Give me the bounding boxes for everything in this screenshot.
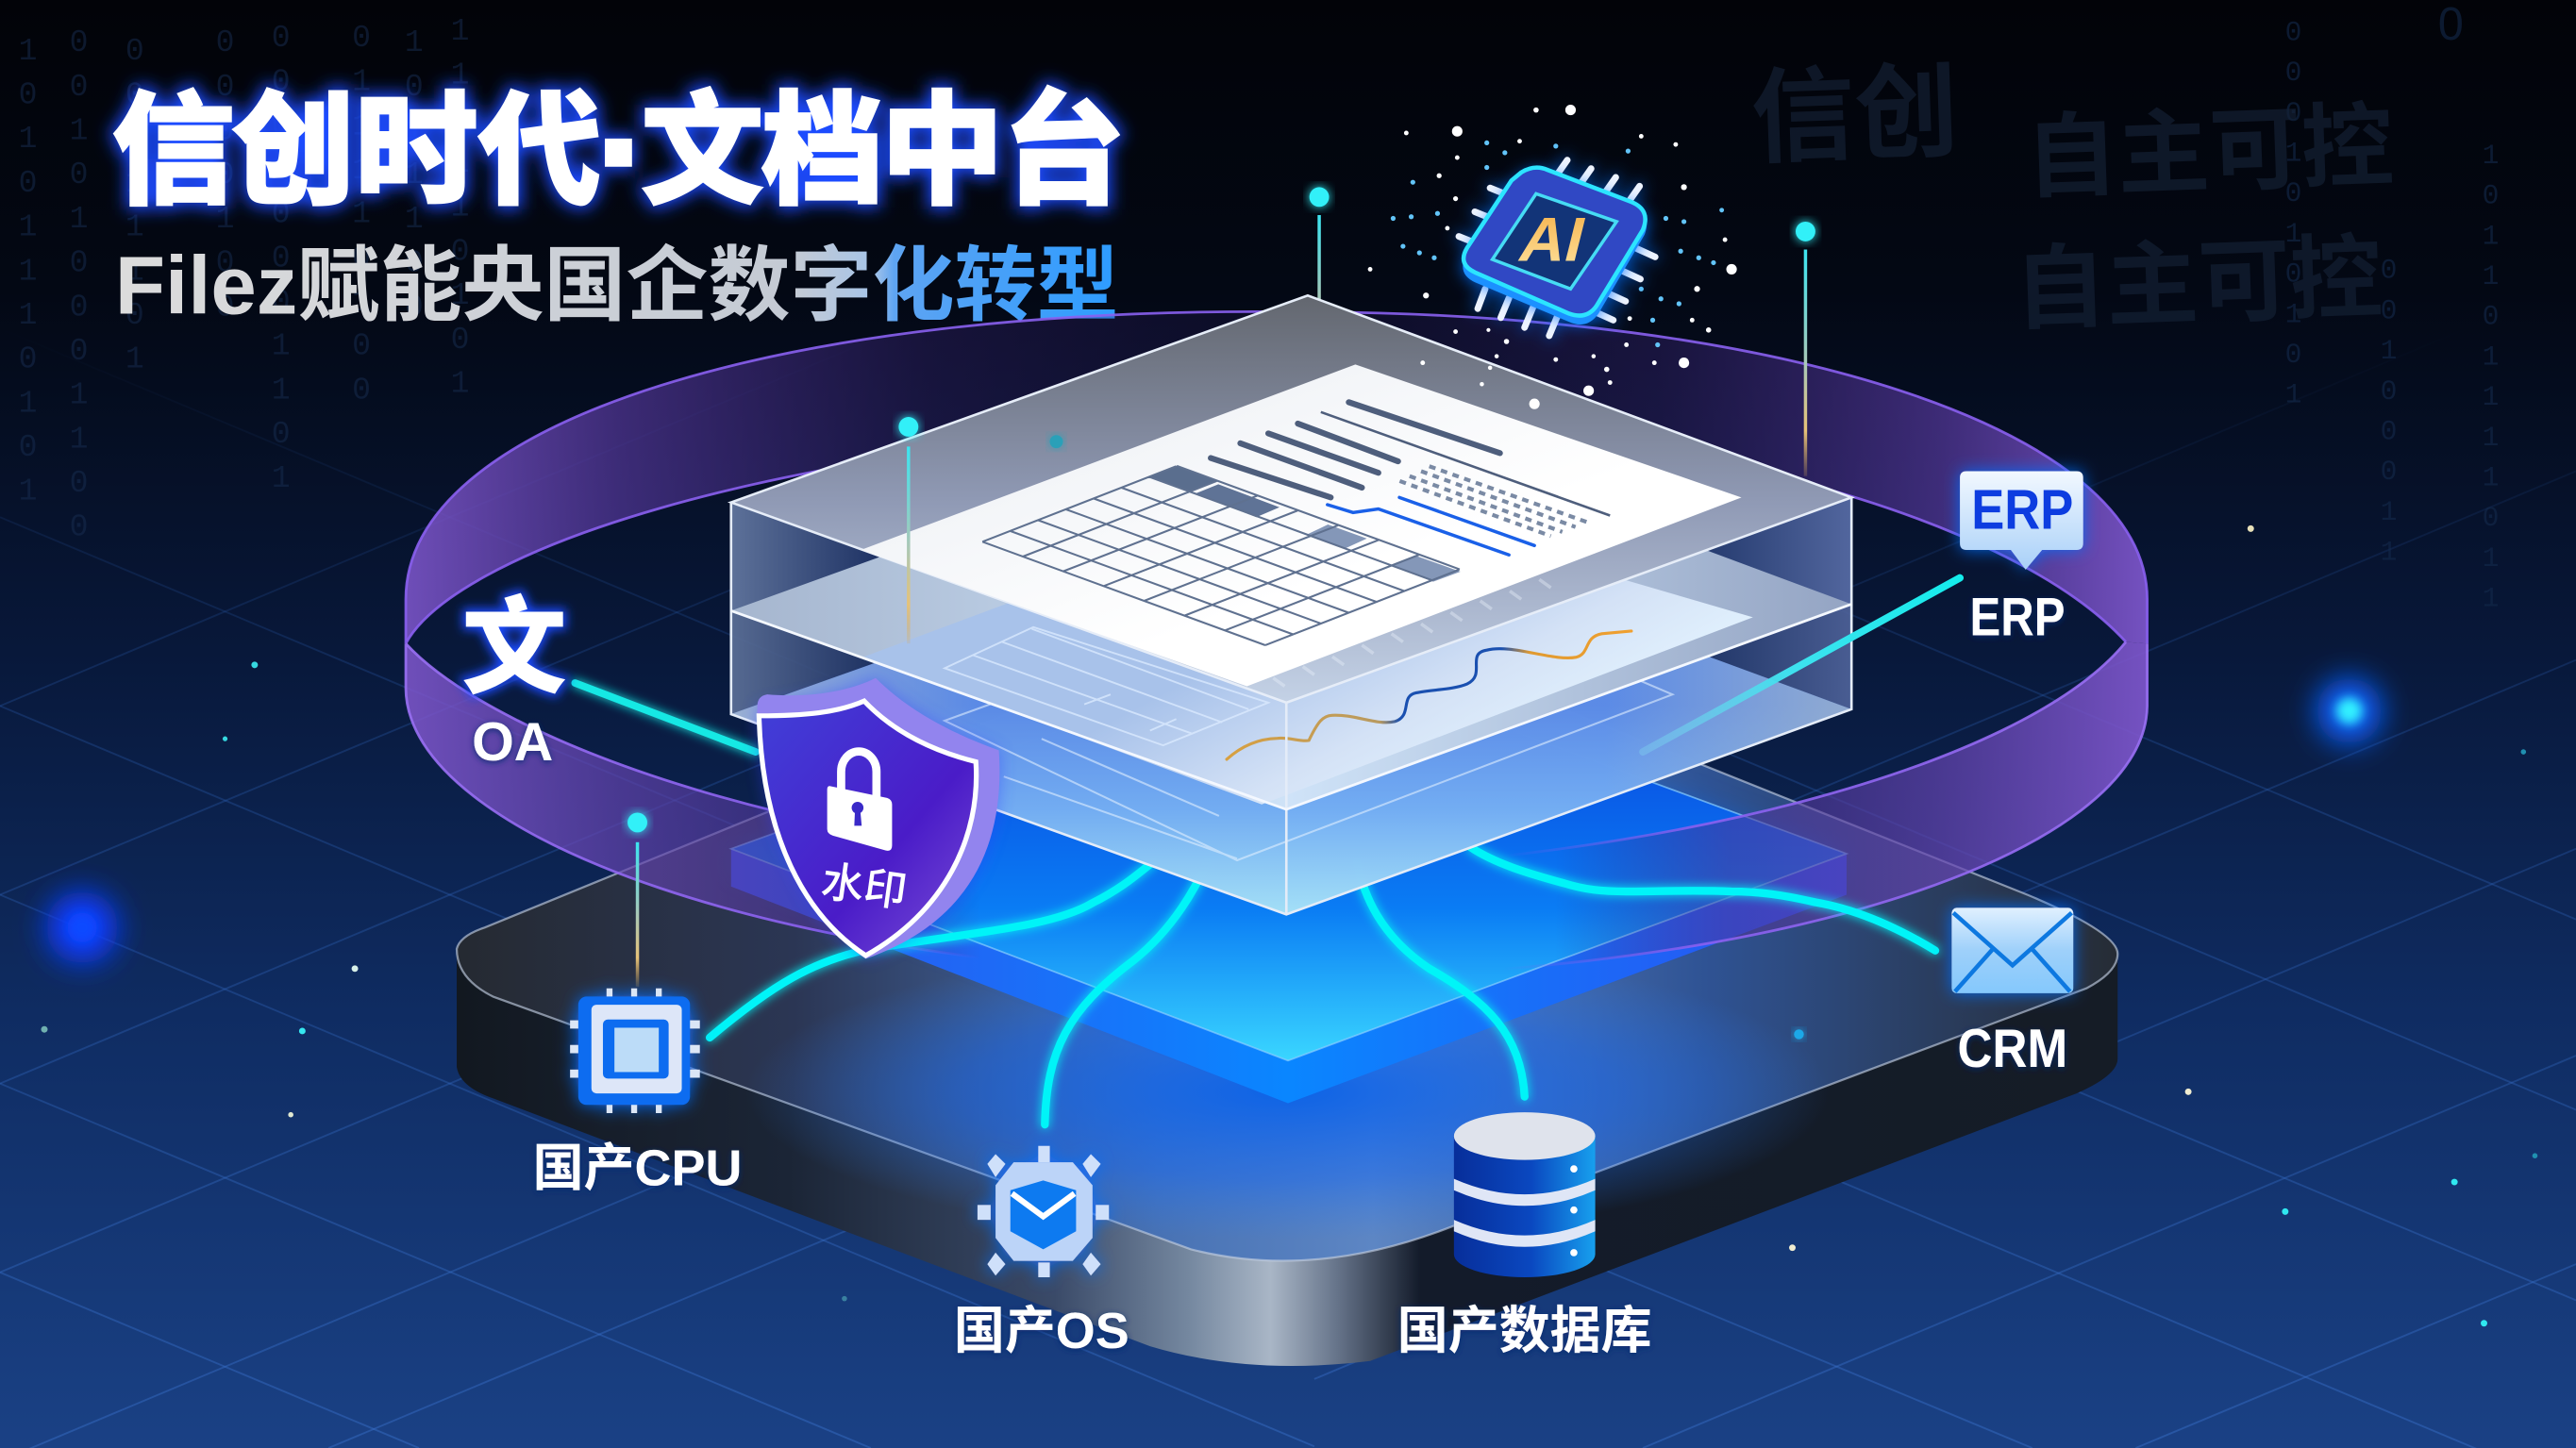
connector: OA [575,683,756,752]
box floor [731,509,1851,914]
AI chip icon [1459,160,1655,336]
ERP node [1960,471,2083,648]
OS icon [978,1146,1109,1277]
lower wall left [731,610,1286,914]
purple ring back band [406,311,2148,643]
chip bevel [1463,170,1647,325]
ERP badge: ERP [1971,477,2073,541]
upper wall right [1286,497,1851,809]
binary rain left: 011110100 [343,20,379,416]
plate glow [731,657,1847,1067]
OA node [461,590,567,773]
binary rain left: 001010001100 [61,25,97,553]
binary rain left: 10101110101 [10,33,46,517]
shield front [759,701,977,956]
connector: CRM [1470,847,1935,951]
plate right side [1288,854,1847,1104]
ERP label: ERP [1970,588,2066,648]
binary rain right [2278,0,2506,623]
base top face [457,599,2117,1260]
faint spark above box [1050,435,1062,448]
blue light under plate [745,944,1831,1240]
CPU label: 国产CPU [533,1140,742,1197]
OS label: 国产OS [954,1303,1129,1359]
title: 信创时代 [111,82,601,220]
binary rain left: 00010001101 [263,20,299,505]
OA icon glyph: 文 [461,590,567,707]
ERP badge [1960,471,2083,570]
vertical pin: CPU [627,812,647,987]
vertical pin: top centre [1310,187,1330,386]
top plane ticks [1273,579,1551,686]
ghost text: 自主可控 bottom: 自主可控 [2013,226,2384,341]
particles [42,525,2537,1326]
database cylinder [1454,1112,1596,1277]
CPU node [533,989,742,1197]
glow orb left [46,891,118,964]
plate top [731,648,1847,1060]
ring front outlines [406,641,2148,977]
glow orb right [2317,678,2383,743]
envelope icon [1951,907,2073,993]
floor sheet outline [945,566,1672,860]
title: 信创时代 [111,82,601,220]
base side face [457,657,2117,1366]
shield bevel [758,678,999,958]
document table [982,466,1461,645]
box top plane [731,295,1851,703]
shield text: 水印 [818,857,910,917]
chart line [1227,631,1631,759]
upper wall left [731,503,1286,809]
middle plane [731,402,1851,809]
CRM label: CRM [1957,1019,2067,1079]
ring back outlines [406,311,2148,643]
binary rain left: 110110101 [442,13,478,409]
ghost text: 信创: 信创 [1749,55,1960,177]
blue light plate [731,648,1847,1104]
floor grey corners [731,509,1851,914]
title: · [601,82,643,220]
chip pins [1459,160,1655,336]
OA icon glyph: 文 [461,590,567,707]
chip label: AI [1513,206,1593,275]
spark on base [1794,1029,1804,1040]
binary rain right: 0001010101 [2278,16,2310,419]
chip inner [1493,193,1616,289]
binary rain left [10,13,478,553]
binary rain right: 00100011 [2373,255,2405,576]
AI chip particles [1368,105,1737,409]
vertical pin: box left [898,417,918,643]
title [111,82,1126,220]
subtitle: Filez赋能央国企数字化转型 [115,240,1119,331]
binary rain left: 00011101 [117,33,153,385]
document rule [1321,412,1610,515]
middle sheet [864,490,1753,805]
document text bars [1211,402,1500,497]
binary rain right: 0 [2438,0,2464,50]
binary rain right: 101101111011 [2474,140,2506,623]
middle sheet table [945,627,1268,745]
ghost text: 自主可控 top: 自主可控 [2024,94,2395,209]
binary rain left: 0000100 [208,25,243,333]
CPU icon [570,989,700,1113]
title: 文档中台 [641,82,1126,220]
OS node [954,1146,1129,1359]
database label: 国产数据库 [1397,1303,1652,1359]
shield lock [828,752,892,851]
connector: database [1357,862,1525,1097]
binary rain left: 1011100 [396,25,432,333]
purple ring front band [406,641,2148,977]
title: 文档中台 [641,82,1126,220]
box level lines [731,604,1851,809]
base platform [457,599,2117,1366]
shield glow [758,678,999,958]
document blue lines [1328,497,1534,555]
connector: OS [1045,862,1208,1124]
connector: CPU [710,862,1153,1038]
vertical pin: right [1796,222,1815,476]
shield icon [758,678,999,958]
top document sheet [861,364,1742,686]
chip body [1464,168,1646,316]
connector lines under box [710,847,1935,1124]
glass document box [731,295,1851,914]
connector: ERP [1643,578,1960,752]
title: · [601,82,643,220]
document dotted text [1399,466,1587,536]
lower wall right [1286,604,1851,914]
OA label: OA [472,712,553,773]
database node [1397,1112,1652,1359]
box edges [731,497,1851,914]
plate left side [731,849,1288,1104]
CRM node [1951,907,2073,1079]
